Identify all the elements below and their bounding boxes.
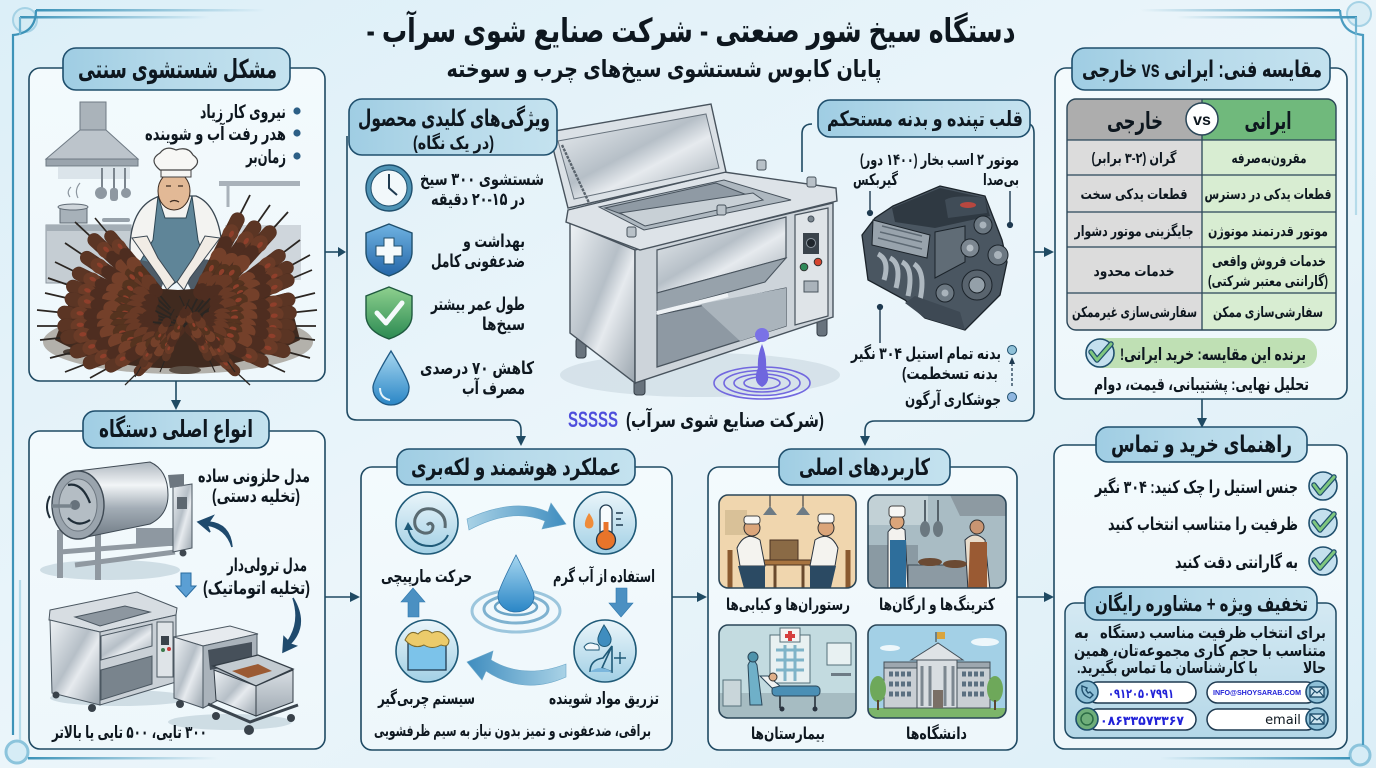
text: body and welding: جوشکاری آرگون bbox=[905, 388, 1001, 410]
text: application labels row two: دانشگاه‌ها bbox=[906, 723, 967, 743]
text: water saving: کاهش ۷۰ درصدی bbox=[420, 358, 535, 378]
contact: phone bbox=[1076, 681, 1196, 703]
header: main applications: کاربردهای اصلی bbox=[799, 454, 930, 481]
checklist: جنس استیل را چک کنید: ۳۰۴ نگیر bbox=[1094, 477, 1298, 498]
text: spiral model bbox=[198, 466, 310, 506]
header: smart performance bbox=[397, 449, 635, 485]
comparison table: خدمات فروش واقعی bbox=[1212, 254, 1326, 270]
comparison table: سفارشی‌سازی غیرممکن bbox=[1072, 305, 1197, 321]
comparison table: سفارشی‌سازی ممکن bbox=[1213, 305, 1323, 321]
kitchen background illustration bbox=[46, 102, 301, 283]
arrow: curved to trolley bbox=[283, 598, 300, 652]
panel: traditional washing problem bbox=[29, 48, 325, 389]
bullet list bbox=[145, 101, 301, 168]
header: machine types bbox=[83, 411, 269, 448]
panel: buying guide and contact bbox=[1054, 427, 1347, 749]
checklist: ظرفیت را متناسب انتخاب کنید bbox=[1108, 514, 1298, 535]
panel: technical comparison bbox=[1055, 48, 1347, 399]
panel: motor and body bbox=[818, 100, 1030, 410]
text: wash capacity bbox=[420, 169, 544, 209]
text: call to action: به bbox=[1074, 625, 1089, 642]
comparison table: قطعات یدکی در دسترس bbox=[1204, 187, 1332, 203]
text: degreaser: سیستم چربی‌گیر bbox=[377, 688, 475, 709]
text: trolley model: (تخلیه اتوماتیک) bbox=[203, 578, 310, 599]
image: hospitals bbox=[719, 625, 856, 718]
header: buying guide: راهنمای خرید و تماس bbox=[1111, 431, 1292, 458]
comparison table: خدمات محدود bbox=[1094, 264, 1174, 280]
text: spiral motion: حرکت مارپیچی bbox=[381, 567, 472, 587]
text: body and welding bbox=[850, 343, 1016, 410]
comparison table bbox=[1067, 99, 1336, 330]
callout: winner bbox=[1086, 338, 1317, 368]
comparison table: (گارانتی معتبر شرکتی) bbox=[1208, 272, 1328, 290]
icon: exhausted chef bbox=[124, 148, 222, 292]
comparison table: vs bbox=[1193, 112, 1211, 129]
panel: machine types bbox=[29, 411, 325, 749]
text: spiral model: (تخلیه دستی) bbox=[212, 486, 300, 506]
bullet list: نیروی کار زیاد bbox=[200, 101, 286, 123]
icon: clock bbox=[366, 165, 412, 211]
text: water saving: مصرف آب bbox=[462, 376, 525, 399]
header: smart performance: عملکرد هوشمند و لکه‌بری bbox=[411, 454, 621, 481]
arrow: bottom curved bbox=[467, 651, 566, 685]
arrow: top curved bbox=[467, 503, 566, 530]
text: skewer life bbox=[430, 294, 525, 335]
text: trolley model: مدل ترولی‌دار bbox=[226, 555, 307, 576]
text: application labels row one: رستوران‌ها و کبابی‌ها bbox=[726, 596, 850, 615]
icon: degreasing system bbox=[396, 620, 458, 682]
text: call to action: برای انتخاب ظرفیت مناسب دستگاه bbox=[1100, 623, 1326, 642]
caption: company name bbox=[568, 407, 824, 432]
header: motor and body bbox=[818, 100, 1030, 137]
icon: water drop bbox=[373, 351, 409, 405]
header: technical comparison bbox=[1072, 48, 1330, 90]
text: motor label bbox=[853, 152, 1019, 189]
text: skewer life: طول عمر بیشتر bbox=[430, 294, 525, 315]
text: hygiene: بهداشت و bbox=[462, 231, 525, 252]
contact: email label: email bbox=[1265, 713, 1301, 728]
checklist: به گارانتی دقت کنید bbox=[1175, 552, 1298, 572]
icon: trolley machine bbox=[168, 626, 298, 735]
text: application labels row one bbox=[726, 594, 995, 615]
text: capacities: ۳۰۰ تایی، ۵۰۰ تایی یا بالاتر bbox=[51, 723, 207, 743]
title bbox=[366, 10, 1016, 83]
image: catering bbox=[868, 495, 1006, 590]
text: body and welding: بدنه تمام استیل ۳۰۴ نگیر bbox=[850, 343, 1001, 364]
icon: hot water thermometer bbox=[574, 492, 636, 554]
contact: email label bbox=[1207, 708, 1328, 730]
connector arrows bbox=[171, 124, 1207, 602]
comparison table: گران (۲-۳ برابر) bbox=[1092, 149, 1177, 167]
panel: main applications bbox=[708, 449, 1017, 750]
text: call to action bbox=[1074, 623, 1326, 677]
image: restaurants bbox=[719, 495, 856, 595]
text: hygiene bbox=[431, 231, 525, 272]
text: call to action: حالا bbox=[1303, 660, 1326, 677]
caption: company name: (شرکت صنایع شوی سرآب) bbox=[626, 407, 824, 432]
text: motor label: موتور ۲ اسب بخار (۱۴۰۰ دور) bbox=[860, 152, 1019, 169]
icon: pile of dirty skewers bbox=[36, 191, 318, 389]
text: application labels row two bbox=[751, 723, 967, 743]
icon: spiral motion bbox=[396, 492, 458, 554]
text: wash capacity: شستشوی ۳۰۰ سیخ bbox=[420, 169, 544, 190]
illustration: stainless steel machine bbox=[549, 104, 840, 397]
comparison table: موتور قدرتمند موتوژن bbox=[1208, 224, 1328, 240]
contact: whatsapp bbox=[1076, 708, 1196, 730]
icon: green shield bbox=[366, 287, 412, 339]
text: call to action: متناسب با حجم کاری مجموعه‌تان، همین bbox=[1074, 643, 1326, 660]
panel: smart performance bbox=[361, 449, 672, 750]
leader lines bbox=[868, 191, 1012, 343]
bullet list: هدر رفت آب و شوینده bbox=[145, 122, 286, 145]
contact: whatsapp: ۰۸۶۳۳۵۷۳۳۶۷ bbox=[1100, 713, 1184, 728]
header: key features: (در یک نگاه) bbox=[413, 132, 494, 153]
title: پایان کابوس شستشوی سیخ‌های چرب و سوخته bbox=[446, 56, 882, 83]
icon: center water drop bbox=[472, 555, 560, 632]
text: application labels row one: کترینگ‌ها و ارگان‌ها bbox=[879, 594, 995, 615]
text: spiral model: مدل حلزونی ساده bbox=[198, 466, 310, 487]
arrow: down right bbox=[609, 588, 633, 617]
text: detergent injection: تزریق مواد شوینده bbox=[549, 689, 659, 709]
contact: email address bbox=[1207, 681, 1328, 703]
text: result: براقی، ضدعفونی و تمیز بدون نیاز به سیم ظرفشویی bbox=[374, 723, 651, 740]
text: wash capacity: در ۱۵-۲۰ دقیقه bbox=[431, 189, 525, 209]
arrow: curved to drum bbox=[198, 516, 232, 547]
icon: drum machine bbox=[40, 462, 192, 580]
box: discount and consultation bbox=[1065, 587, 1336, 738]
icon: engine bbox=[862, 186, 1008, 330]
checklist bbox=[1094, 472, 1337, 575]
text: call to action: با کارشناسان ما تماس بگیرید. bbox=[1077, 658, 1258, 677]
text: application labels row two: بیمارستان‌ها bbox=[751, 725, 825, 743]
arrow: down blue bbox=[176, 573, 196, 597]
header: buying guide bbox=[1096, 427, 1307, 462]
icon: detergent injection bbox=[574, 620, 636, 682]
header: traditional washing problem bbox=[63, 48, 290, 90]
image: universities bbox=[868, 625, 1006, 718]
comparison table: قطعات یدکی سخت bbox=[1080, 187, 1188, 203]
text: skewer life: سیخ‌ها bbox=[482, 314, 525, 335]
header: traditional washing problem: مشکل شستشوی سنتی bbox=[78, 54, 277, 85]
comparison table: خارجی bbox=[1107, 108, 1163, 135]
icon: health shield bbox=[366, 224, 412, 276]
text: motor label: گیربکس bbox=[853, 170, 898, 189]
watermark logo bbox=[714, 328, 810, 399]
panel: key features bbox=[349, 99, 557, 405]
contact: phone: ۰۹۱۲۰۵۰۷۹۹۱ bbox=[1108, 686, 1174, 701]
text: motor label: بی‌صدا bbox=[983, 172, 1019, 189]
caption: company name: SSSSS bbox=[568, 407, 618, 432]
comparison table: مقرون‌به‌صرفه bbox=[1232, 151, 1306, 167]
text: trolley model bbox=[203, 555, 310, 599]
title: دستگاه سیخ شور صنعتی - شرکت صنایع شوی سرآب - bbox=[366, 10, 1016, 51]
comparison table: جایگزینی موتور دشوار bbox=[1074, 222, 1194, 240]
header: key features bbox=[349, 99, 557, 155]
callout: winner: برنده این مقایسه: خرید ایرانی! bbox=[1120, 345, 1306, 365]
text: hot water: استفاده از آب گرم bbox=[553, 565, 655, 587]
text: hygiene: ضدعفونی کامل bbox=[431, 251, 525, 272]
comparison table: ایرانی bbox=[1244, 108, 1292, 135]
icon: fixed machine bbox=[49, 592, 190, 712]
header: machine types: انواع اصلی دستگاه bbox=[99, 415, 253, 443]
arrow: up left bbox=[401, 588, 425, 617]
text: body and welding: بدنه تسخطمت) bbox=[902, 365, 998, 383]
header: main applications bbox=[779, 449, 950, 485]
header: key features: ویژگی‌های کلیدی محصول bbox=[358, 105, 550, 132]
header: motor and body: قلب تپنده و بدنه مستحکم bbox=[827, 108, 1023, 131]
header: discount bbox=[1085, 587, 1317, 620]
bullet list: زمان‌بر bbox=[245, 146, 286, 168]
contact: email address: INFO@SHOYSARAB.COM bbox=[1213, 688, 1301, 697]
text: water saving bbox=[420, 358, 535, 399]
